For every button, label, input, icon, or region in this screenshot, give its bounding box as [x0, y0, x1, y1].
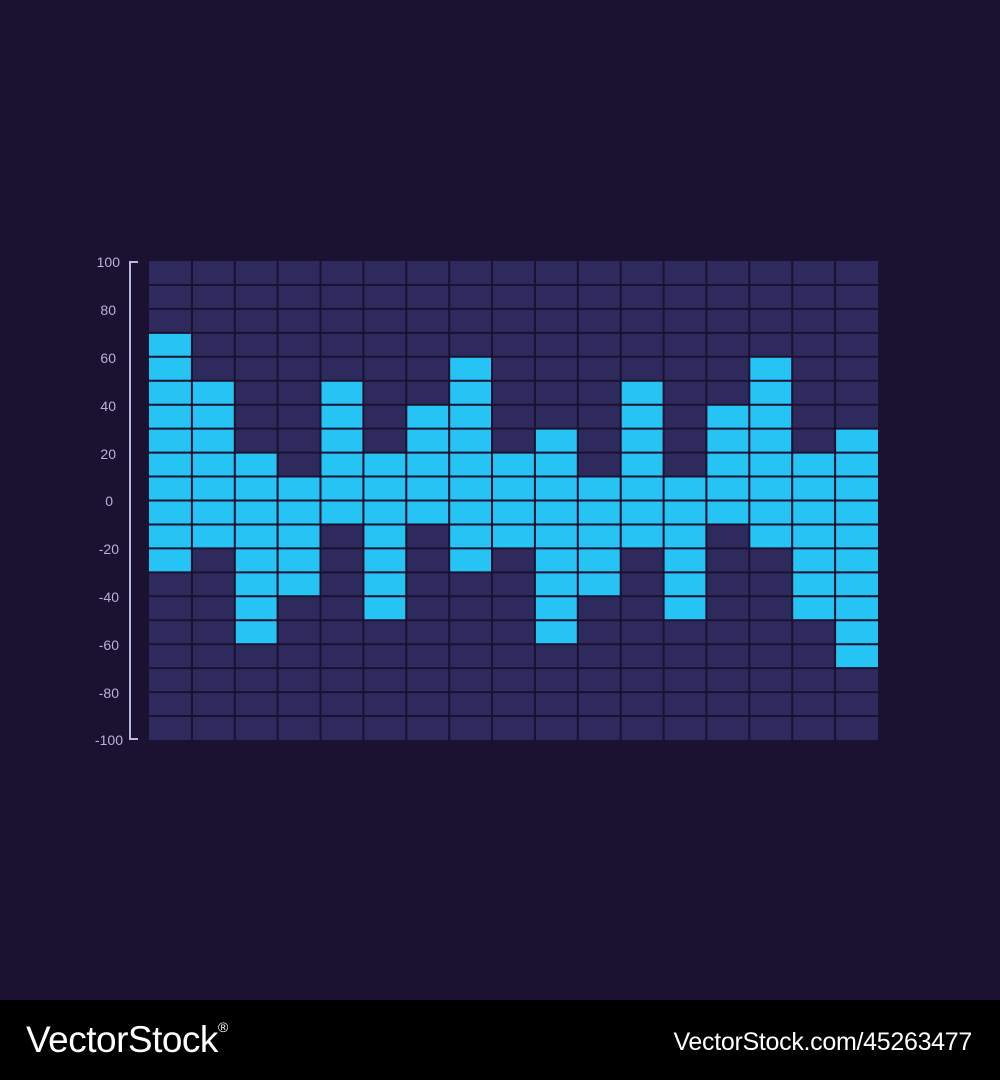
y axis: -100 [95, 732, 123, 748]
y axis: -40 [99, 589, 119, 605]
y axis: 20 [100, 446, 116, 462]
y axis: 80 [100, 302, 116, 318]
y axis: -80 [99, 685, 119, 701]
y axis: 100 [97, 254, 120, 270]
footer bar [0, 1000, 1000, 1080]
grid of cells [149, 261, 878, 740]
footer logo text: VectorStock® [26, 1019, 228, 1060]
bars [149, 333, 878, 668]
y axis: -60 [99, 637, 119, 653]
footer id text: VectorStock.com/45263477 [673, 1028, 972, 1056]
y axis: 40 [100, 398, 116, 414]
y axis: 0 [105, 493, 113, 509]
y axis [95, 254, 138, 748]
y axis: -20 [99, 541, 119, 557]
y axis: 60 [100, 350, 116, 366]
